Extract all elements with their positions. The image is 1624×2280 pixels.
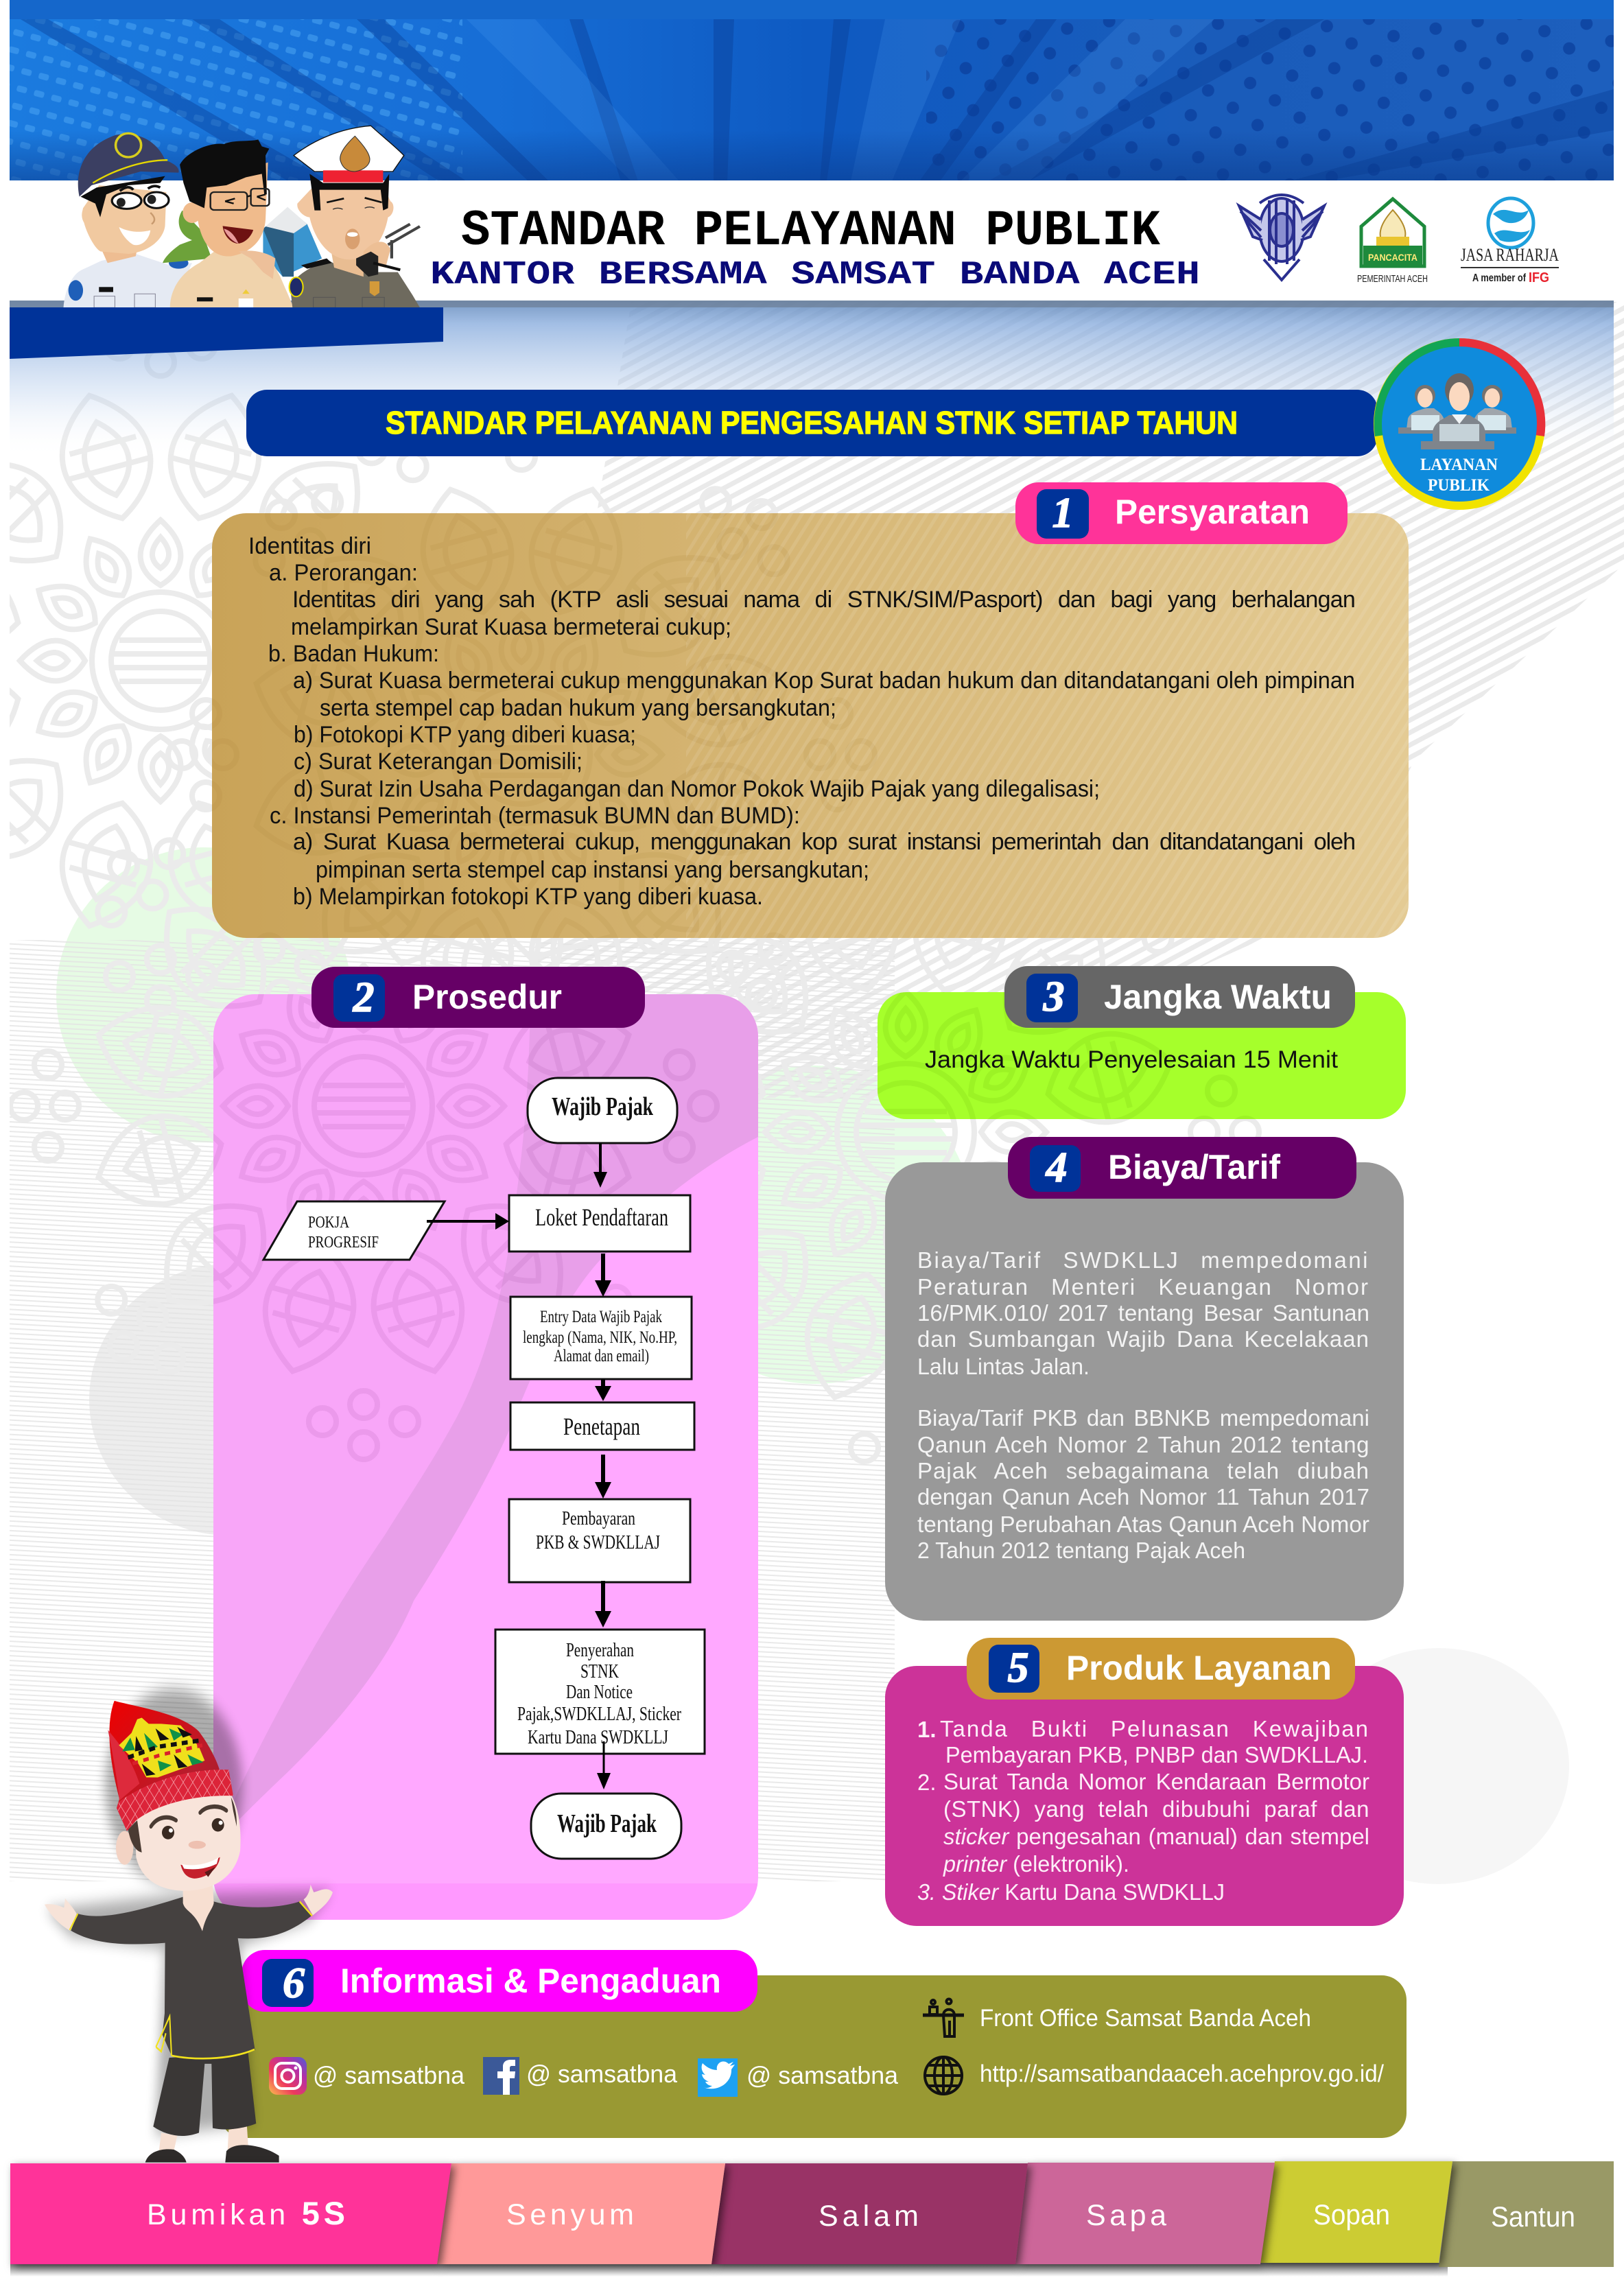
- mascot character in Acehnese dress: [45, 1689, 333, 2163]
- icon: globe: [925, 2057, 962, 2094]
- footer segment: Salam: [711, 2163, 1028, 2264]
- section 1 body text: pimpinan serta stempel cap instansi yang bersangkutan;: [316, 857, 869, 883]
- mascot: hands: [45, 1885, 333, 1931]
- heading pill 4: Biaya/Tarif: Biaya/Tarif: [1108, 1148, 1280, 1186]
- title: STANDAR PELAYANAN PUBLIK: [461, 202, 1160, 259]
- official: Jasa Raharja officer: [63, 133, 192, 307]
- section 5 body text: printer (elektronik).: [943, 1851, 1129, 1877]
- footer segment: Senyum: Senyum: [506, 2198, 634, 2231]
- heading pill 4: Biaya/Tarif: [1008, 1137, 1356, 1199]
- flow arrows: [427, 1143, 611, 1789]
- icon: front office: [923, 1999, 964, 2036]
- heading pill 3: Jangka Waktu: Jangka Waktu: [1104, 978, 1332, 1016]
- subtitle: KANTOR BERSAMA SAMSAT BANDA ACEH: [430, 257, 1200, 294]
- heading pill 6: Informasi dan Pengaduan: Informasi & Pengaduan: [340, 1962, 721, 2000]
- logo: Pemerintah Aceh: PANCACITA: [1368, 252, 1417, 263]
- footer segment: Senyum: [437, 2163, 725, 2264]
- flowchart labels: PKB & SWDKLLAJ: [536, 1532, 660, 1553]
- footer segment: Sopan: Sopan: [1313, 2198, 1390, 2231]
- logo: Pemerintah Aceh: PEMERINTAH ACEH: [1357, 273, 1428, 285]
- section 4 body text: 2 Tahun 2012 tentang Pajak Aceh: [917, 1538, 1245, 1563]
- icon: Layanan Publik badge: [1374, 338, 1545, 510]
- section 5 body text: [917, 1715, 1369, 1905]
- footer segment: Sapa: [1015, 2163, 1275, 2264]
- icon: Layanan Publik badge: PUBLIK: [1428, 476, 1490, 495]
- section 5 body text: 2.: [917, 1770, 937, 1795]
- section 4 body text: Biaya/Tarif SWDKLLJ mempedomani: [917, 1247, 1369, 1273]
- heading pill 4: Biaya/Tarif: 4: [1046, 1144, 1068, 1191]
- panel 1: Persyaratan: [212, 513, 1409, 938]
- section 1 body text: a) Surat Kuasa bermeterai cukup menggunakan Kop Surat badan hukum dan ditandatangani oleh pimpinan: [293, 668, 1355, 694]
- flowchart labels: Entry Data Wajib Pajak: [540, 1308, 662, 1326]
- flowchart labels: lengkap (Nama, NIK, No.HP,: [523, 1328, 677, 1347]
- section 4 body text: Pajak Aceh sebagaimana telah diubah: [917, 1458, 1369, 1483]
- icon: Facebook: [483, 2057, 519, 2095]
- flowchart labels: [308, 1092, 682, 1838]
- flowchart labels: Loket Pendaftaran: [535, 1203, 668, 1231]
- section 4 body text: tentang Perubahan Atas Qanun Aceh Nomor: [917, 1512, 1369, 1537]
- section 4 body text: Qanun Aceh Nomor 2 Tahun 2012 tentang: [917, 1432, 1369, 1457]
- section 1 body text: melampirkan Surat Kuasa bermeterai cukup;: [291, 614, 731, 640]
- panel 6: Informasi dan Pengaduan: [220, 1975, 1407, 2138]
- section 1 body text: [248, 533, 1355, 910]
- main title banner: STANDAR PELAYANAN PENGESAHAN STNK SETIAP TAHUN: [386, 405, 1238, 440]
- section 1 body text: d) Surat Izin Usaha Perdagangan dan Nomor Pokok Wajib Pajak yang dilegalisasi;: [294, 776, 1100, 802]
- footer segment: Sapa: Sapa: [1086, 2199, 1166, 2232]
- section 1 body text: c. Instansi Pemerintah (termasuk BUMN dan BUMD):: [270, 803, 800, 829]
- section 1 body text: Identitas diri: [248, 533, 371, 559]
- panel 6: Informasi dan Pengaduan: @ samsatbna: [313, 2061, 465, 2089]
- flow node: Pembayaran: [509, 1499, 690, 1582]
- header cartoon officials: [63, 126, 420, 307]
- section 4 body text: 16/PMK.010/ 2017 tentang Besar Santunan: [917, 1300, 1369, 1326]
- official: police officer: [290, 126, 420, 307]
- section 1 body text: b) Melampirkan fotokopi KTP yang diberi kuasa.: [293, 884, 763, 910]
- footer slogan bar: [10, 2161, 1614, 2277]
- flow node: Penetapan: [510, 1402, 694, 1450]
- panel 6: Informasi dan Pengaduan: http://samsatbandaaceh.acehprov.go.id/: [980, 2060, 1384, 2087]
- heading pill 5: Produk Layanan: [967, 1638, 1355, 1700]
- flow node: Pokja Progresif input: [263, 1201, 445, 1260]
- flow node: Wajib Pajak start: [528, 1078, 677, 1143]
- heading pill 1: Persyaratan: Persyaratan: [1115, 493, 1310, 531]
- background pattern: [0, 301, 1624, 1982]
- section 1 body text: b) Fotokopi KTP yang diberi kuasa;: [294, 722, 636, 748]
- header white title band: [10, 180, 1614, 307]
- icon: Instagram: [269, 2057, 307, 2095]
- flowchart labels: Wajib Pajak: [557, 1809, 657, 1838]
- flowchart labels: Alamat dan email): [554, 1347, 649, 1365]
- heading pill 3: Jangka Waktu: [1004, 966, 1355, 1028]
- flowchart labels: POKJA: [308, 1214, 350, 1232]
- official: civil servant: [170, 139, 294, 307]
- logo: Jasa Raharja: [1461, 198, 1559, 285]
- section 1 body text: serta stempel cap badan hukum yang bersangkutan;: [320, 695, 836, 721]
- mascot: trousers and shoes: [145, 2053, 279, 2163]
- heading pill 5: Produk Layanan: Produk Layanan: [1066, 1649, 1332, 1687]
- section 5 body text: 1.: [917, 1717, 937, 1742]
- logo: Jasa Raharja: IFG: [1529, 270, 1549, 285]
- footer segment: Santun: [1439, 2161, 1614, 2267]
- flowchart labels: Kartu Dana SWDKLLJ: [528, 1727, 668, 1748]
- footer segment: Bumikan 5S: [10, 2163, 451, 2264]
- heading pill 3: Jangka Waktu: 3: [1043, 974, 1065, 1020]
- section 4 body text: Lalu Lintas Jalan.: [917, 1354, 1090, 1379]
- flowchart labels: Penyerahan: [566, 1640, 634, 1661]
- section 5 body text: Tanda Bukti Pelunasan Kewajiban: [940, 1716, 1369, 1741]
- heading pill 2: Prosedur: 2: [353, 974, 375, 1021]
- section 4 body text: Biaya/Tarif PKB dan BBNKB mempedomani: [917, 1405, 1369, 1431]
- footer segment: Sopan: [1260, 2161, 1452, 2263]
- panel 3: Jangka Waktu: Jangka Waktu Penyelesaian 15 Menit: [925, 1046, 1338, 1073]
- footer segment: Bumikan 5S: Bumikan 5S: [147, 2195, 345, 2231]
- flow node: Wajib Pajak end: [531, 1794, 681, 1859]
- flowchart labels: Penetapan: [563, 1413, 640, 1440]
- header banner: blue patterned background: [10, 0, 1614, 181]
- mascot: dark tunic: [71, 1897, 312, 2060]
- section 4 body text: dan Sumbangan Wajib Dana Kecelakaan: [917, 1326, 1369, 1352]
- panel 4: Biaya/Tarif: [885, 1162, 1404, 1621]
- section 1 body text: b. Badan Hukum:: [268, 641, 439, 667]
- logo: Jasa Raharja: JASA RAHARJA: [1461, 245, 1559, 265]
- section 5 body text: (STNK) yang telah dibubuhi paraf dan: [943, 1796, 1369, 1822]
- footer segment: Salam: Salam: [819, 2200, 919, 2233]
- main title banner: [246, 390, 1378, 456]
- mascot: red traditional hat: [108, 1701, 233, 1831]
- section 4 body text: dengan Qanun Aceh Nomor 11 Tahun 2017: [917, 1484, 1369, 1509]
- flowchart: procedure steps: [263, 1078, 705, 1859]
- heading pill 1: Persyaratan: 1: [1052, 490, 1073, 537]
- section 5 body text: Surat Tanda Nomor Kendaraan Bermotor: [943, 1769, 1369, 1794]
- heading pill 6: Informasi dan Pengaduan: [242, 1950, 757, 2012]
- flow node: Entry Data: [510, 1297, 692, 1379]
- section 1 body text: Identitas diri yang sah (KTP asli sesuai nama di STNK/SIM/Pasport) dan bagi yang berhalangan: [292, 587, 1355, 613]
- section 5 body text: Pembayaran PKB, PNBP dan SWDKLLAJ.: [945, 1742, 1368, 1767]
- logo: Pemerintah Aceh: [1357, 199, 1428, 285]
- flowchart labels: PROGRESIF: [308, 1234, 379, 1251]
- section 5 body text: 3. Stiker Kartu Dana SWDKLLJ: [917, 1879, 1225, 1905]
- section 4 body text: [917, 1247, 1369, 1563]
- panel 3: Jangka Waktu: [878, 992, 1406, 1119]
- flowchart labels: Pembayaran: [562, 1508, 635, 1529]
- mascot: neck and face: [116, 1794, 241, 1931]
- panel 2: Prosedur: [10, 753, 758, 1920]
- section 1 body text: a) Surat Kuasa bermeterai cukup, menggunakan kop surat instansi pemerintah dan ditandatangani oleh: [293, 829, 1355, 855]
- logo: Jasa Raharja: A member of: [1472, 272, 1527, 284]
- icon: Layanan Publik badge: LAYANAN: [1420, 456, 1498, 474]
- panel 6: Informasi dan Pengaduan: @ samsatbna: [746, 2061, 899, 2089]
- flowchart labels: Pajak,SWDKLLAJ, Sticker: [517, 1704, 682, 1725]
- section 4 body text: Peraturan Menteri Keuangan Nomor: [917, 1274, 1369, 1300]
- flowchart labels: Wajib Pajak: [552, 1092, 654, 1121]
- icon: Twitter: [698, 2058, 738, 2097]
- panel 6: Informasi dan Pengaduan: @ samsatbna: [526, 2060, 678, 2088]
- official: building and plant behind: [163, 207, 322, 277]
- heading pill 1: Persyaratan: [1015, 482, 1348, 544]
- logo: Polri emblem: [1239, 195, 1324, 280]
- flowchart labels: STNK: [580, 1661, 619, 1682]
- flow node: Loket Pendaftaran: [509, 1195, 690, 1251]
- heading pill 5: Produk Layanan: 5: [1007, 1645, 1029, 1691]
- section 1 body text: c) Surat Keterangan Domisili;: [294, 749, 582, 775]
- section 5 body text: sticker pengesahan (manual) dan stempel: [943, 1824, 1369, 1849]
- section 1 body text: a. Perorangan:: [269, 560, 418, 586]
- blue ribbon below header: [10, 307, 443, 359]
- heading pill 2: Prosedur: Prosedur: [412, 978, 562, 1016]
- flowchart labels: Dan Notice: [566, 1682, 633, 1703]
- flow node: Penyerahan: [495, 1630, 705, 1754]
- heading pill 6: Informasi dan Pengaduan: 6: [283, 1958, 305, 2007]
- panel 5: Produk Layanan: [885, 1666, 1404, 1926]
- footer segment: Santun: Santun: [1491, 2200, 1575, 2233]
- heading pill 2: Prosedur: [311, 967, 645, 1028]
- panel 6: Informasi dan Pengaduan: Front Office Samsat Banda Aceh: [980, 2005, 1311, 2032]
